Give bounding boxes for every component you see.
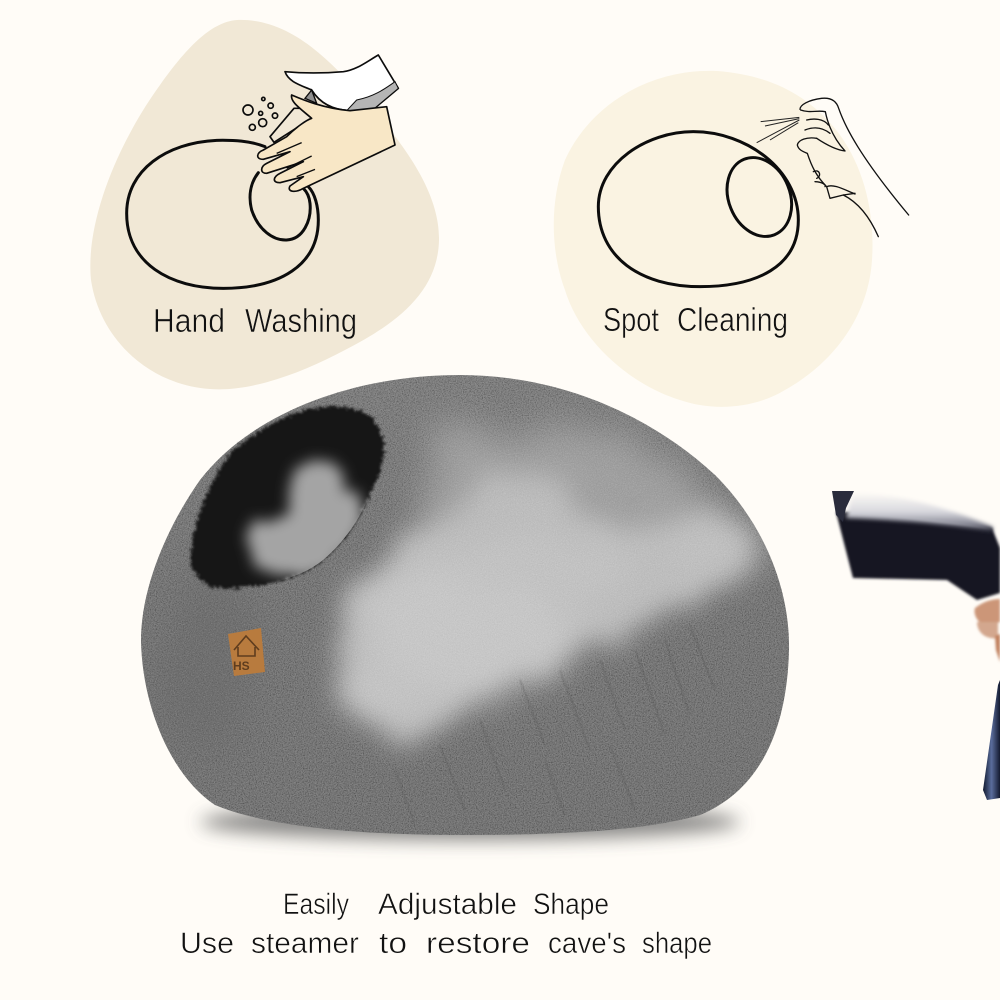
steamer handle: [983, 680, 1000, 800]
panel: spot cleaning: [554, 71, 909, 407]
caption line 2: cave's: [548, 927, 626, 960]
blob background: hand washing: [90, 20, 439, 389]
finger separators: [277, 143, 315, 177]
steam inside the hole: [248, 461, 365, 577]
steamer sheen: [846, 492, 993, 532]
steamer nozzle tip: [832, 491, 854, 522]
caption line 2: restore: [426, 927, 530, 960]
leather tag: HS: [233, 659, 250, 673]
caption line 1: Easily: [283, 888, 349, 921]
caption line 2: to: [379, 927, 407, 960]
label: Hand Washing: Washing: [245, 302, 357, 339]
cat cave with steam: [130, 365, 800, 845]
cave entrance hole: [191, 406, 384, 588]
label: Spot Cleaning: Spot: [603, 301, 659, 338]
felt fibre streaks: [395, 625, 715, 825]
upper haze: [404, 406, 732, 540]
label: Spot Cleaning: [603, 301, 788, 338]
label: Hand Washing: Hand: [153, 302, 225, 339]
spray mist: [757, 117, 799, 143]
caption line 2: [180, 927, 712, 960]
panel: hand washing: [90, 20, 439, 389]
caption: [180, 888, 712, 960]
icon: cat cave outline with spray bottle hand: [598, 98, 909, 287]
blob background: spot cleaning: [554, 71, 873, 407]
caption line 2: steamer: [251, 927, 359, 960]
caption line 2: Use: [180, 927, 234, 960]
hand holding steamer: [974, 599, 1000, 662]
label: Hand Washing: [153, 302, 357, 339]
caption line 1: [283, 888, 609, 921]
icon: cat cave outline with washing hands: [127, 55, 398, 288]
floor shadow under cave: [200, 804, 740, 840]
caption line 1: Shape: [533, 888, 609, 921]
handheld steamer: [832, 491, 1000, 800]
leather tag: [228, 628, 265, 676]
darker area beside opening: [144, 590, 250, 738]
steamer head: [836, 512, 1000, 600]
caption line 1: Adjustable: [378, 888, 517, 921]
back hand fingers: [270, 108, 312, 142]
cave body: [130, 365, 800, 845]
label: Spot Cleaning: Cleaning: [677, 301, 788, 338]
steam on cave: [345, 470, 755, 745]
felt grain: [161, 390, 780, 746]
sleeve: [285, 55, 398, 111]
soap bubbles: [243, 97, 278, 130]
spray hand lines: [797, 98, 909, 237]
front hand: [258, 95, 395, 191]
caption line 2: shape: [642, 927, 712, 960]
